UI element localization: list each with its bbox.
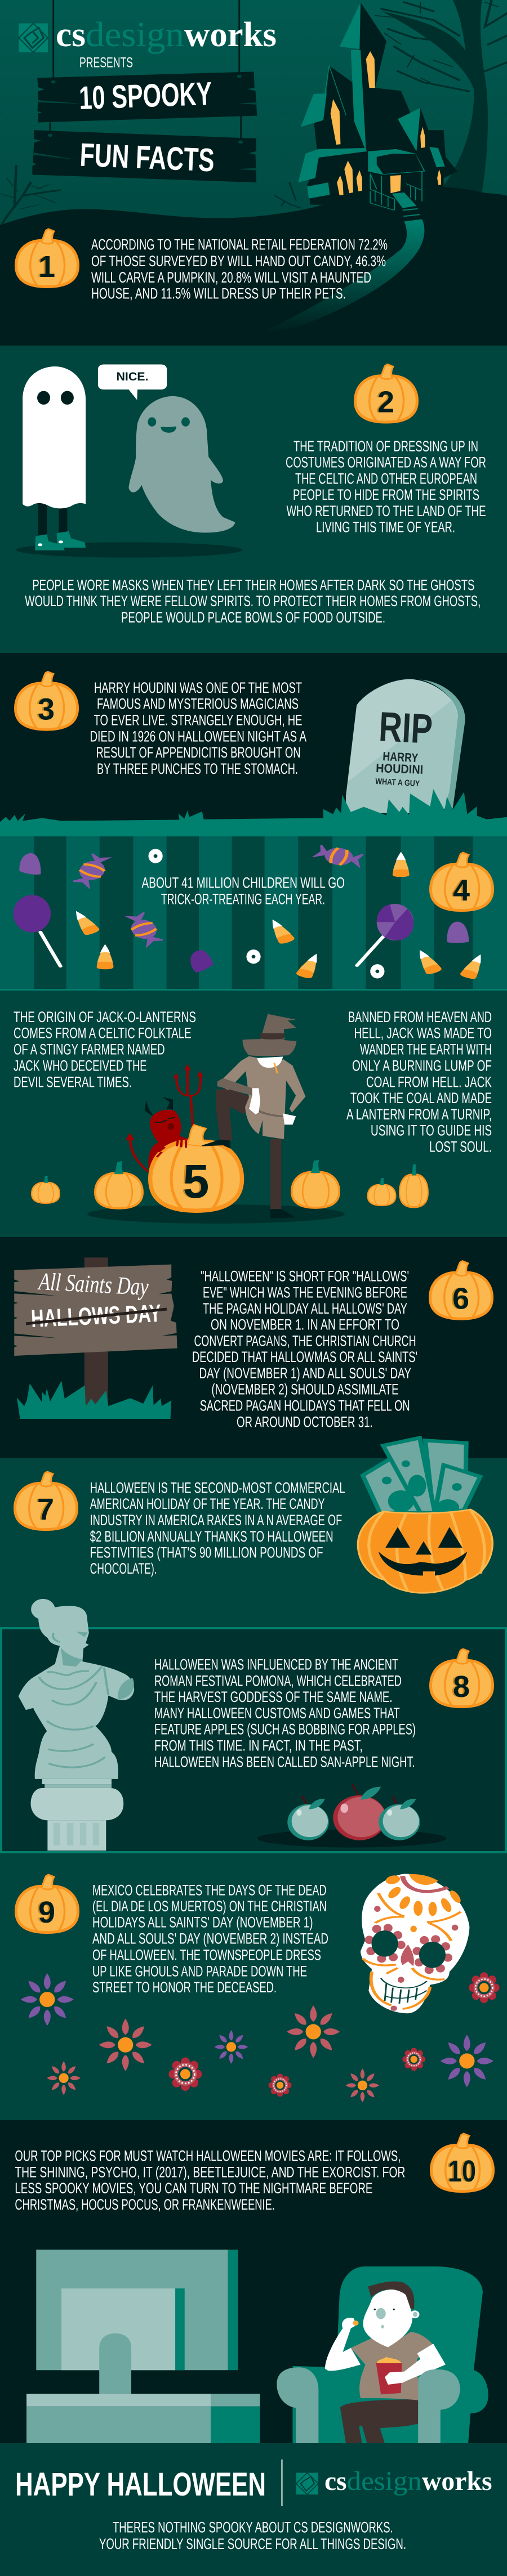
fact 5 text right <box>346 1009 492 1155</box>
panel: fact 10 movies <box>0 2120 507 2444</box>
fact 4 text: ABOUT 41 MILLION CHILDREN WILL GO <box>142 875 345 891</box>
spooky tree <box>375 0 507 192</box>
fact 2 extra text <box>25 576 481 626</box>
pumpkin badge 1 <box>16 229 78 287</box>
pumpkin badge 4: 4 <box>453 873 470 907</box>
television <box>36 2250 238 2394</box>
small pumpkin b <box>95 1161 143 1208</box>
statue <box>19 1599 134 1851</box>
tombstone text: RIP <box>378 703 434 752</box>
title <box>78 75 215 178</box>
devil <box>126 1064 203 1172</box>
grass <box>17 1381 171 1419</box>
statue and apples <box>19 1599 446 1851</box>
fact 9 text: (EL DIA DE LOS MUERTOS) ON THE CHRISTIAN <box>92 1898 327 1915</box>
sugar skull <box>361 1874 469 2013</box>
fact 3 text: BY THREE PUNCHES TO THE STOMACH. <box>97 760 298 777</box>
fact 9 text <box>92 1881 328 1996</box>
pumpkin badge 3: 3 <box>38 693 55 727</box>
fact 6 text <box>192 1268 417 1430</box>
panel: header and fact 1 <box>0 0 507 347</box>
pumpkin badge 10: 10 <box>448 2154 476 2188</box>
fact 2 extra text: PEOPLE WOULD PLACE BOWLS OF FOOD OUTSIDE. <box>121 609 385 626</box>
fact 9 text: AND ALL SOULS' DAY (NOVEMBER 2) INSTEAD <box>92 1930 328 1947</box>
devil and farmer illustration <box>126 1014 305 1218</box>
fact 4 text: TRICK-OR-TREATING EACH YEAR. <box>161 890 325 907</box>
person watching <box>325 2282 446 2444</box>
real ghost <box>128 396 235 532</box>
footer logo wordmark <box>324 2466 492 2496</box>
small pumpkin d <box>368 1178 395 1206</box>
sign text: HALLOWS DAY <box>30 1300 162 1333</box>
footer logo wordmark: works <box>422 2466 492 2496</box>
armchair <box>277 2266 488 2444</box>
fact 2 text <box>286 438 486 536</box>
pumpkin badge 9 <box>16 1875 78 1933</box>
fact 6 text: SACRED PAGAN HOLIDAYS THAT FELL ON <box>200 1397 410 1414</box>
wooden sign <box>14 1257 177 1419</box>
panel: fact 9 day of the dead <box>0 1853 507 2120</box>
tombstone text <box>375 703 434 789</box>
pumpkin badge 10 <box>432 2134 493 2192</box>
fact 9 text: UP LIKE GHOULS AND PARADE DOWN THE <box>92 1963 307 1979</box>
winding path <box>259 219 424 334</box>
grass strip <box>0 789 507 837</box>
big pumpkin stem and devil claws <box>154 1125 230 1157</box>
pumpkin badge 6: 6 <box>452 1282 469 1316</box>
speech bubble text: NICE. <box>116 370 149 383</box>
bill details <box>382 1461 462 1516</box>
rose flowers <box>47 2005 379 2102</box>
farmer <box>202 1014 305 1218</box>
pumpkin badge 9: 9 <box>38 1896 55 1929</box>
lollipops <box>14 895 413 966</box>
fact 5 text left: OF A STINGY FARMER NAMED <box>14 1041 165 1058</box>
fact 9 text: OF HALLOWEEN. THE TOWNSPEOPLE DRESS <box>92 1946 321 1963</box>
tombstone and grass <box>0 679 507 837</box>
tombstone text: WHAT A GUY <box>375 777 420 789</box>
footer logo wordmark: cs <box>324 2466 347 2496</box>
fact 3 text <box>90 679 306 777</box>
panel: fact 2 ghosts <box>0 346 507 653</box>
sheet ghost legs and shoes <box>35 502 86 550</box>
movie scene <box>26 2250 488 2444</box>
fact 7 text <box>90 1479 345 1577</box>
fact 4 text <box>142 875 345 907</box>
dollar bills <box>363 1438 480 1513</box>
fact 3 text: TO EVER LIVE. STRANGELY ENOUGH, HE <box>94 711 302 728</box>
ground shadow <box>16 543 242 558</box>
title: FUN FACTS <box>79 137 215 178</box>
pumpkin badge 1: 1 <box>38 250 55 284</box>
sign text <box>26 1267 167 1333</box>
skull and flowers <box>21 1874 500 2102</box>
haunted house <box>298 2 459 216</box>
pumpkin badge 6 <box>430 1261 492 1319</box>
logo icon <box>19 24 48 52</box>
fact 1 text: HOUSE, AND 11.5% WILL DRESS UP THEIR PETS. <box>91 285 346 302</box>
pumpkin badge 8: 8 <box>453 1670 470 1704</box>
fact 7 text: AMERICAN HOLIDAY OF THE YEAR. THE CANDY <box>90 1495 325 1512</box>
pumpkin badge 2 <box>355 365 417 422</box>
money and jack-o-lantern <box>358 1438 492 1593</box>
sheet ghost <box>23 366 86 508</box>
fact 6 text: THE PAGAN HOLIDAY ALL HALLOWS' DAY <box>203 1300 407 1317</box>
pumpkin badge 8 <box>430 1649 492 1706</box>
fact 7 text: $2 BILLION ANNUALLY THANKS TO HALLOWEEN <box>90 1528 333 1545</box>
small pumpkin e <box>399 1164 428 1207</box>
fact 7 text: CHOCOLATE). <box>90 1560 157 1577</box>
fact 5 text left: JACK WHO DECEIVED THE <box>14 1057 146 1074</box>
fact 3 text: RESULT OF APPENDICITIS BROUGHT ON <box>96 744 301 761</box>
panel: footer <box>0 2443 507 2576</box>
ghost illustration <box>16 364 242 558</box>
hill <box>0 187 507 347</box>
fact 8 text <box>154 1656 416 1770</box>
purple flowers <box>21 1973 493 2087</box>
small pumpkin c <box>292 1160 339 1208</box>
tombstone text: HARRY <box>383 749 419 765</box>
fact 1 text <box>91 236 388 302</box>
fact 6 text: OR AROUND OCTOBER 31. <box>237 1413 373 1430</box>
dead tree left <box>0 166 301 225</box>
tombstone text: HOUDINI <box>376 761 424 777</box>
fact 6 text: DAY (NOVEMBER 1) AND ALL SOULS' DAY <box>199 1365 411 1382</box>
panel: fact 6 Hallows day <box>0 1237 507 1458</box>
panel: fact 7 commercial holiday <box>0 1438 507 1627</box>
sign boards <box>32 71 257 182</box>
candy rings <box>148 849 384 978</box>
tombstone <box>346 679 465 813</box>
fact 6 text: ON NOVEMBER 1. IN AN EFFORT TO <box>211 1316 399 1333</box>
happy halloween heading: HAPPY HALLOWEEN <box>15 2466 266 2503</box>
fact 7 text: FESTIVITIES (THAT'S 90 MILLION POUNDS OF <box>90 1544 323 1561</box>
hanging ropes <box>50 0 241 144</box>
fact 5 text left <box>14 1009 196 1090</box>
footer text <box>99 2519 406 2552</box>
fact 8 text: FROM THIS TIME. IN FACT, IN THE PAST, <box>154 1737 363 1754</box>
panel: fact 4 candy <box>0 836 507 991</box>
fact 6 text: (NOVEMBER 2) SHOULD ASSIMILATE <box>211 1381 399 1398</box>
header illustration <box>0 0 507 347</box>
fact 6 text: EVE" WHICH WAS THE EVENING BEFORE <box>203 1284 407 1301</box>
logo wordmark <box>56 16 277 54</box>
fact 5 text left: THE ORIGIN OF JACK-O-LANTERNS <box>14 1009 196 1025</box>
fact 10 text: CHRISTMAS, HOCUS POCUS, OR FRANKENWEENIE. <box>15 2196 275 2213</box>
fact 8 text: MANY HALLOWEEN CUSTOMS AND GAMES THAT <box>154 1705 400 1722</box>
pumpkin number 5: 5 <box>183 1155 209 1208</box>
pumpkin badge 7 <box>15 1472 77 1530</box>
logo wordmark: cs <box>56 16 86 54</box>
fact 5 text left: COMES FROM A CELTIC FOLKTALE <box>14 1025 192 1042</box>
jack-o-lantern <box>358 1509 492 1593</box>
fact 1 text: WILL CARVE A PUMPKIN, 20.8% WILL VISIT A HAUNTED <box>91 269 371 286</box>
fact 10 text <box>15 2148 405 2213</box>
fact 3 text: HARRY HOUDINI WAS ONE OF THE MOST <box>94 679 302 696</box>
marigolds <box>168 1972 500 2096</box>
pumpkin badge 4 <box>430 853 492 911</box>
logo wordmark: works <box>184 16 277 54</box>
presents label: PRESENTS <box>79 55 133 71</box>
fact 7 text: HALLOWEEN IS THE SECOND-MOST COMMERCIAL <box>90 1479 345 1496</box>
armchair right arm <box>418 2369 460 2444</box>
apples <box>257 1784 446 1848</box>
panel: fact 3 Houdini <box>0 653 507 837</box>
fact 3 text: FAMOUS AND MYSTERIOUS MAGICIANS <box>97 696 299 713</box>
pumpkin badge 2: 2 <box>377 385 394 419</box>
fact 3 text: DIED IN 1926 ON HALLOWEEN NIGHT AS A <box>90 728 306 745</box>
panel: fact 8 Pomona <box>1 1599 506 1852</box>
ground shadow <box>87 1204 345 1224</box>
footer logo icon <box>296 2473 318 2494</box>
tv console <box>26 2394 260 2444</box>
candy illustration <box>14 836 488 989</box>
pumpkin badge 7: 7 <box>37 1493 54 1526</box>
small pumpkin a <box>32 1176 60 1203</box>
panel: fact 5 Jack-o-lanterns <box>0 991 507 1237</box>
speech bubble shape <box>98 364 167 400</box>
wrapped candies <box>71 844 365 947</box>
fact 9 text: MEXICO CELEBRATES THE DAYS OF THE DEAD <box>92 1881 327 1898</box>
fact 8 text: THE HARVEST GODDESS OF THE SAME NAME. <box>154 1688 392 1705</box>
divider <box>282 2459 283 2506</box>
pumpkin badge 3 <box>16 672 78 729</box>
logo wordmark: design <box>86 16 184 54</box>
fact 6 text: "HALLOWEEN" IS SHORT FOR "HALLOWS' <box>201 1268 409 1285</box>
fact 9 text: HOLIDAYS ALL SAINTS' DAY (NOVEMBER 1) <box>92 1914 313 1931</box>
sign text: All Saints Day <box>37 1267 149 1301</box>
fact 9 text: STREET TO HONOR THE DECEASED. <box>92 1979 277 1996</box>
fact 7 text: INDUSTRY IN AMERICA RAKES IN A N AVERAGE OF <box>90 1512 342 1529</box>
footer logo wordmark: design <box>347 2466 422 2496</box>
gumdrops <box>19 853 469 972</box>
fact 5 text left: DEVIL SEVERAL TIMES. <box>14 1073 132 1090</box>
title: 10 SPOOKY <box>78 75 212 117</box>
candy corn <box>69 852 488 980</box>
fact 1 text: OF THOSE SURVEYED BY WILL HAND OUT CANDY, 46.3% <box>91 253 386 270</box>
big pumpkin <box>150 1142 242 1211</box>
